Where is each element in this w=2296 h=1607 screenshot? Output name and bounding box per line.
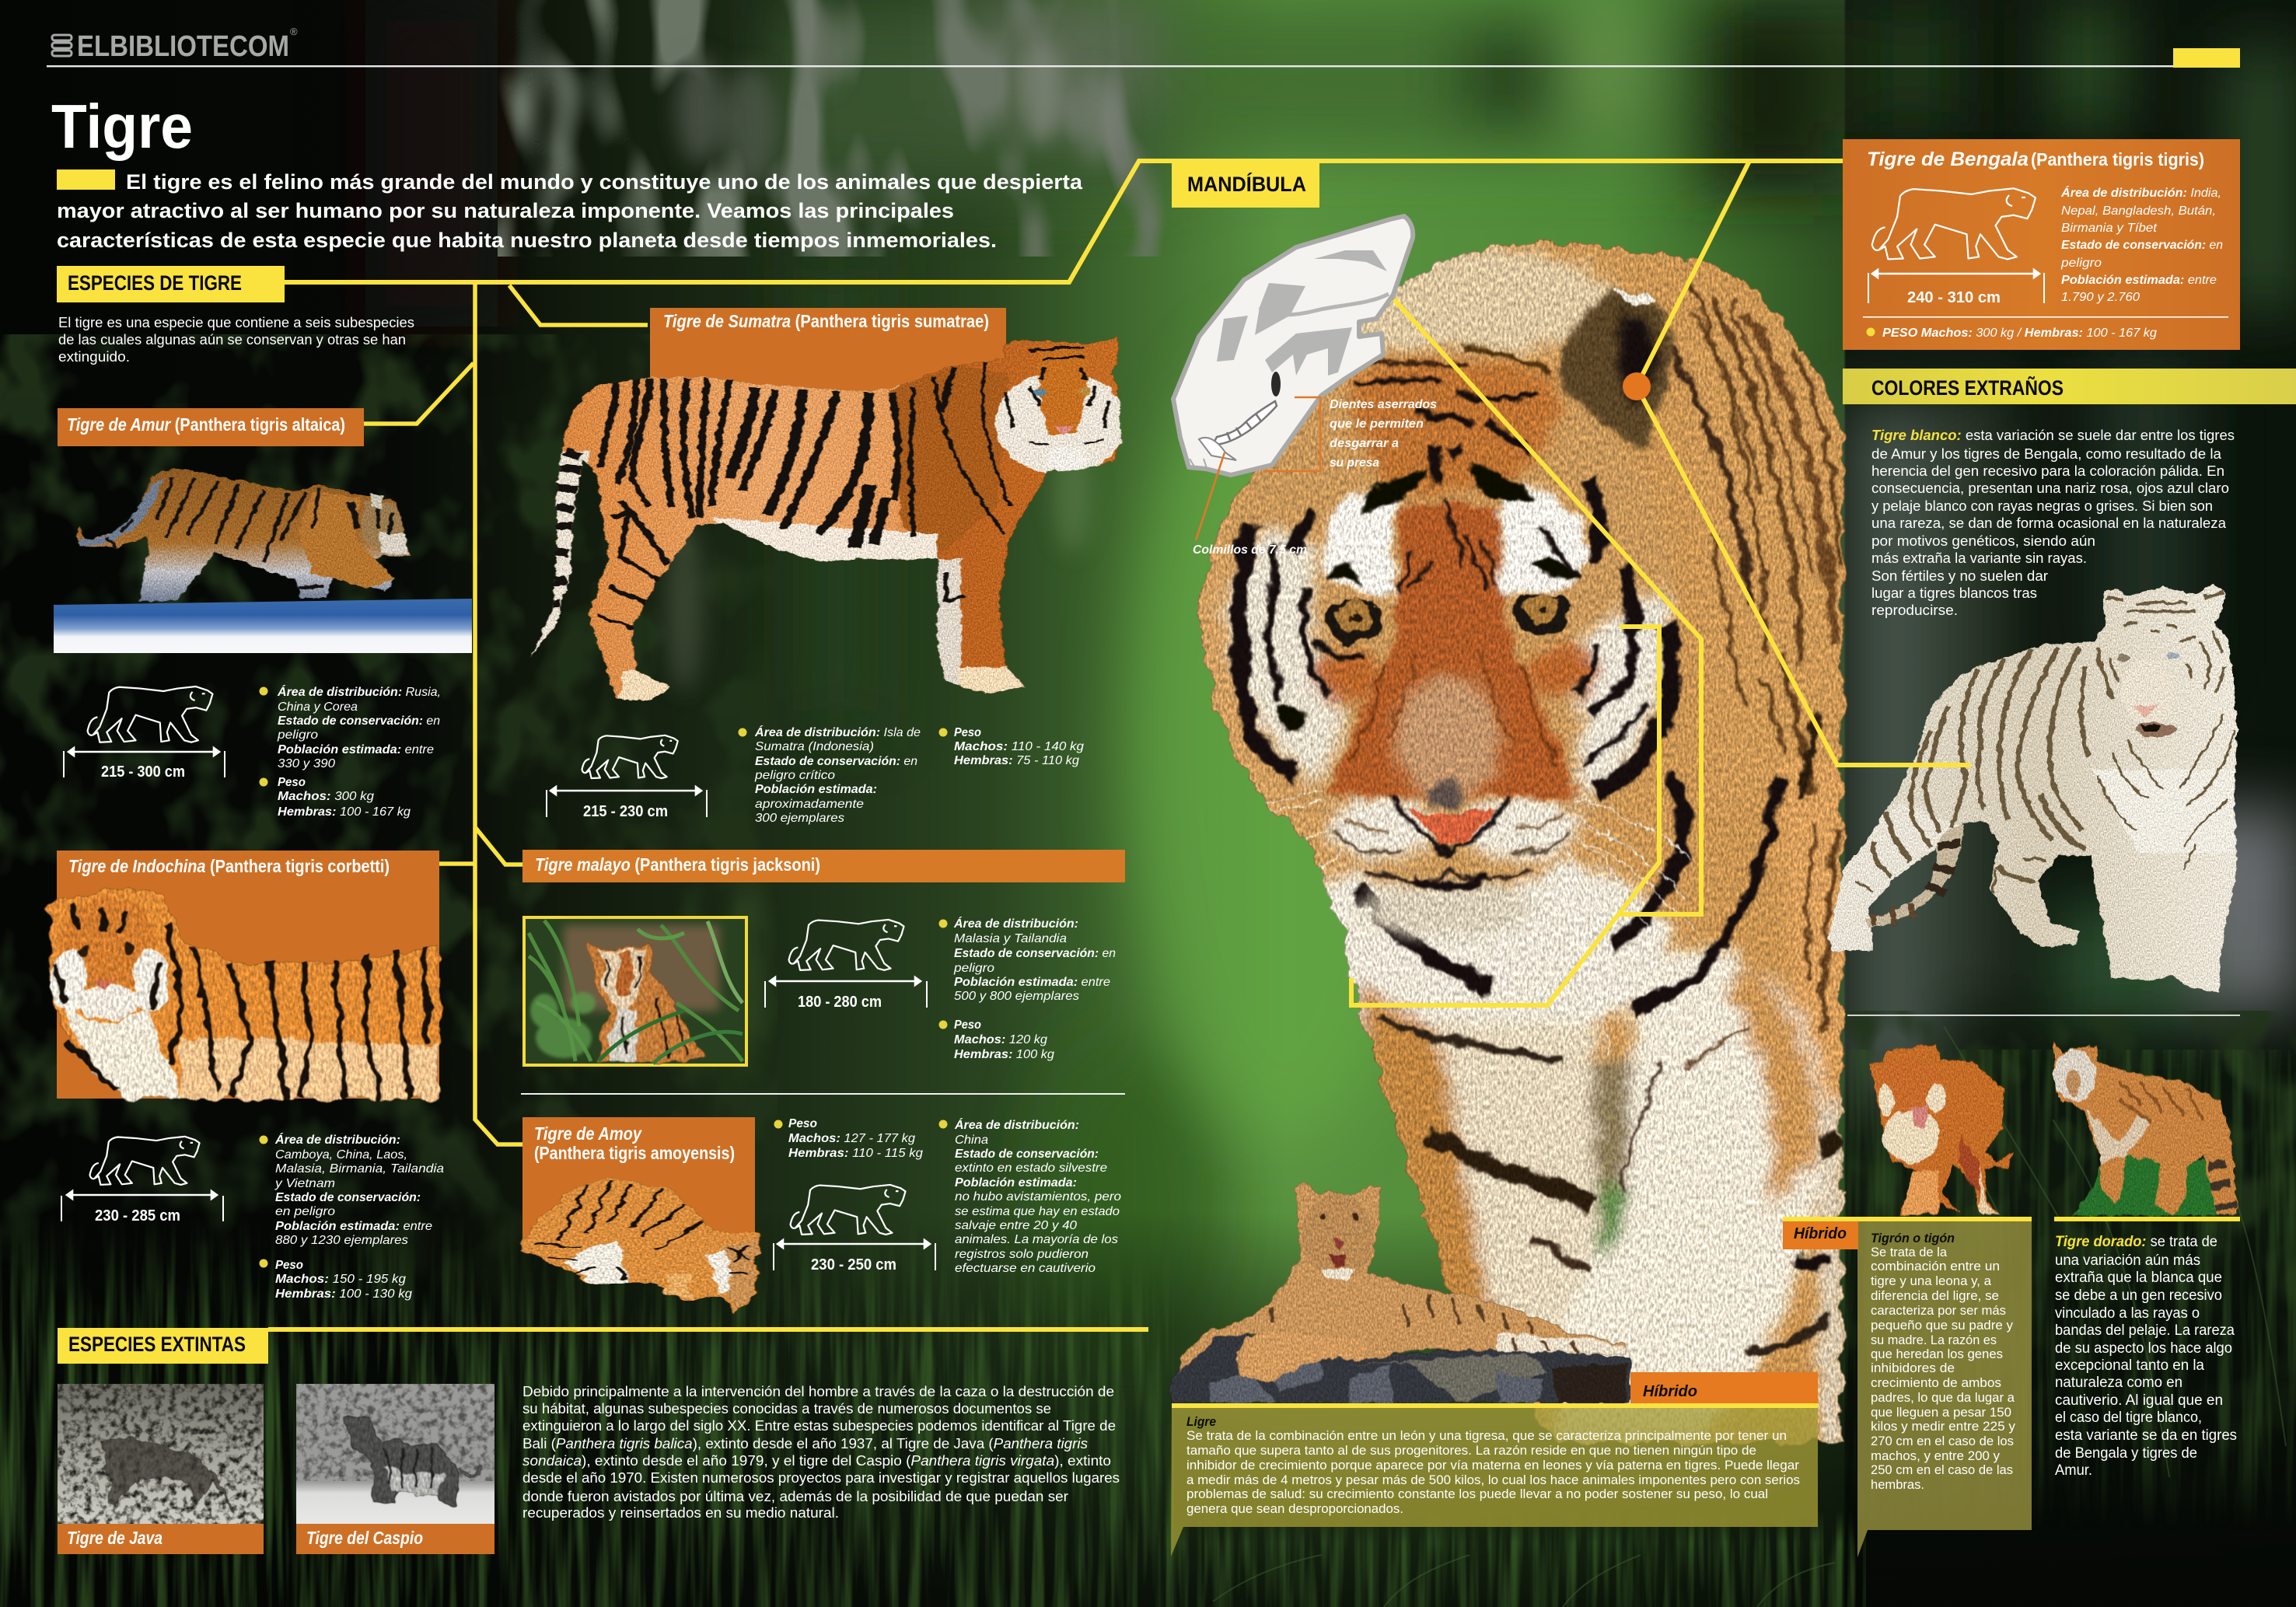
annotation: dientes aserrados: Dientes aserrados — [1330, 398, 1437, 411]
panel: tigre de amoy: (Panthera tigris amoyensis) — [534, 1143, 735, 1163]
text: tigre dorado: vinculado a las rayas o — [2055, 1305, 2200, 1322]
icon: tiger silhouette malayo, with length measure — [765, 920, 927, 1011]
text: sumatra data: Población estimada: — [755, 783, 877, 796]
panel: tigrón híbrido — [1783, 1217, 2032, 1557]
text: indochina data: Camboya, China, Laos, — [275, 1148, 407, 1162]
panel: tigrón híbrido: su madre. La razón es — [1871, 1333, 1997, 1347]
icon: tiger silhouette amoy, with length measure: 230 - 250 cm — [811, 1256, 896, 1273]
annotation lines — [1196, 397, 1320, 540]
text: tigre dorado: extraña que la blanca que — [2055, 1270, 2222, 1286]
text: extinct species: recuperados y reinsertados en su medio natural. — [522, 1505, 839, 1521]
text: bengala data: Población estimada: entre — [2061, 274, 2217, 287]
text: sumatra data: aproximadamente — [755, 798, 864, 811]
text: tigre blanco: herencia del gen recesivo para la coloración pálida. En — [1871, 463, 2224, 479]
icon: tiger silhouette sumatra, with length measure: 215 - 230 cm — [583, 803, 668, 820]
text: tigre blanco: Son fértiles y no suelen dar — [1871, 568, 2048, 584]
icon: tiger silhouette bengala — [1872, 188, 2036, 259]
text: tigre dorado: se debe a un gen recesivo — [2055, 1287, 2222, 1304]
text: indochina data: Hembras: 100 - 130 kg — [275, 1287, 412, 1301]
text: extinct species: su hábitat, algunas subespecies conocidas a través de numerosos documentos se — [522, 1401, 1051, 1417]
white tiger tail — [1865, 825, 1963, 928]
heading: mandíbula — [1172, 163, 1319, 208]
text: extinct species: desde el año 1970. Existen numerosos proyectos para investigar y registrar aquellos lugares — [522, 1470, 1120, 1486]
panel: ligre híbrido: Ligre — [1186, 1414, 1216, 1429]
text: bengala data: Birmania y Tíbet — [2061, 222, 2158, 235]
text: tigre blanco: una rareza, se dan de forma ocasional en la naturaleza — [1871, 515, 2227, 531]
text: amoy data: Machos: 127 - 177 kg — [788, 1132, 915, 1145]
annotation: dientes aserrados: desgarrar a — [1330, 437, 1399, 450]
panel: tigre de bengala — [1843, 139, 2240, 350]
text: malayo data: Estado de conservación: en — [954, 947, 1116, 960]
text: malayo data — [939, 916, 1116, 1061]
big central tiger photo — [1151, 218, 1845, 1448]
header: logo: ® — [290, 26, 298, 37]
text: sumatra data — [739, 725, 1084, 825]
text: indochina data: Machos: 150 - 195 kg — [275, 1273, 406, 1286]
text: amur data: Peso — [278, 776, 306, 789]
intro text: especies: El tigre es una especie que contiene a seis subespecies — [58, 315, 414, 330]
yellow line over white tiger — [1835, 763, 1971, 767]
text: malayo data: Machos: 120 kg — [954, 1033, 1047, 1046]
text: tigre dorado — [2054, 1217, 2240, 1479]
text: indochina data: Población estimada: entre — [275, 1220, 432, 1233]
text: amoy data: Peso — [788, 1117, 817, 1130]
text: amoy data: Estado de conservación: — [955, 1148, 1099, 1161]
text: bengala data: 1.790 y 2.760 — [2061, 291, 2140, 304]
text: amur data: China y Corea — [278, 700, 358, 714]
panel: ligre híbrido: Se trata de la combinación entre un león y una tigresa, que se caracteriza principalmente por tener un — [1186, 1428, 1787, 1443]
text: sumatra data: Estado de conservación: en — [755, 755, 917, 768]
marker dot on ear — [1623, 372, 1651, 400]
panel: tigrón híbrido: caracteriza por ser más — [1871, 1303, 2006, 1318]
annotation: colmillos: Colmillos de 7,5 cm — [1193, 543, 1307, 557]
panel: ligre híbrido: problemas de salud: su crecimiento constante los puede llevar a no poder sostener su peso, lo cual — [1186, 1486, 1768, 1501]
text: bengala data: Estado de conservación: en — [2061, 239, 2223, 252]
text: indochina data: y Vietnam — [274, 1177, 335, 1190]
panel: tigrón híbrido: tigre y una leona y, a — [1871, 1273, 1992, 1288]
photo: golden tiger — [2053, 1044, 2238, 1216]
photo: malayan tiger in jungle — [524, 917, 746, 1065]
text: bengala data: Área de distribución: India, — [2060, 185, 2221, 200]
text: amoy data: animales. La mayoría de los — [955, 1233, 1118, 1246]
panel: tigrón híbrido: Se trata de la — [1871, 1245, 1948, 1259]
text: malayo data: Malasia y Tailandia — [954, 932, 1067, 945]
text: tigre blanco — [1871, 427, 2235, 618]
photo: indochina tiger — [45, 888, 439, 1099]
heading: colores extraños — [1843, 369, 2296, 404]
annotation: dientes aserrados: su presa — [1330, 456, 1379, 470]
text: malayo data: Hembras: 100 kg — [954, 1048, 1054, 1061]
heading: colores extraños: COLORES EXTRAÑOS — [1871, 376, 2064, 400]
text: tigre dorado: bandas del pelaje. La rareza — [2055, 1322, 2235, 1339]
photo: tigron — [1869, 1044, 2015, 1216]
photo card: tigre del caspio — [296, 1384, 494, 1554]
text: extinct species: Bali (Panthera tigris balica ), extinto desde el año 1937, al Tigre de Java ( Panthera tigris — [522, 1436, 1088, 1452]
icon: tiger silhouette indochina, with length measure — [61, 1137, 223, 1224]
icon: tiger silhouette sumatra, with length measure — [547, 735, 707, 820]
text: amoy data: salvaje entre 20 y 40 — [955, 1219, 1077, 1232]
panel: tigre malayo: Tigre malayo (Panthera tigris jacksoni) — [535, 854, 820, 875]
panel: tigrón híbrido: Híbrido — [1794, 1225, 1847, 1242]
photo: amur tiger — [76, 468, 410, 602]
text: amoy data: se estima que hay en estado — [955, 1205, 1120, 1218]
panel: tigrón híbrido: 250 cm en el caso de las — [1871, 1462, 2013, 1477]
panel: tigre de indochina — [45, 851, 439, 1099]
text: bengala data: Nepal, Bangladesh, Bután, — [2061, 204, 2216, 218]
text: tigre dorado: Amur. — [2055, 1462, 2092, 1479]
text: amoy data: Población estimada: — [955, 1176, 1077, 1190]
panel: tigre de amoy: Tigre de Amoy — [534, 1123, 642, 1144]
text: tigre dorado: Tigre dorado: se trata de — [2055, 1234, 2217, 1250]
snow strip — [54, 599, 472, 653]
panel: ligre híbrido: inhibidor de crecimiento porque aparece por vía materna en leones y vía paterna en tigres. Puede llegar — [1186, 1458, 1799, 1473]
text: indochina data: 880 y 1230 ejemplares — [275, 1234, 408, 1247]
text: tigre blanco: reproducirse. — [1871, 602, 1958, 618]
text: tigre dorado: de su aspecto los hace algo — [2055, 1340, 2232, 1357]
text: sumatra data: Sumatra (Indonesia) — [755, 740, 874, 753]
panel: tigre de sumatra: Tigre de Sumatra (Panthera tigris sumatrae) — [663, 311, 989, 331]
panel: tigrón híbrido: padres, lo que da lugar a — [1871, 1390, 2015, 1405]
text: extinct species — [522, 1384, 1120, 1521]
photo card: tigre del caspio: Tigre del Caspio — [306, 1528, 423, 1548]
text: tigre dorado: el caso del tigre blanco, — [2055, 1410, 2202, 1426]
intro paragraph: El tigre es el felino más grande del mundo y constituye uno de los animales que despierta — [126, 170, 1083, 194]
panel: ligre híbrido: Híbrido — [1643, 1383, 1697, 1400]
panel: tigrón híbrido: que heredan los genes — [1871, 1347, 2003, 1361]
text: tigre dorado: de Bengala y tigres de — [2055, 1445, 2197, 1462]
photo: amoy tiger — [522, 1178, 759, 1313]
photo: white tiger — [1827, 583, 2239, 992]
text: amoy data: China — [955, 1134, 988, 1147]
header: logo: ELBIBLIOTECOM — [77, 30, 289, 63]
heading: especies extintas: ESPECIES EXTINTAS — [68, 1333, 246, 1356]
text: amur data: Machos: 300 kg — [278, 790, 374, 803]
text: sumatra data: Área de distribución: Isla de — [754, 725, 921, 739]
text: amoy data — [774, 1117, 1121, 1275]
text: sumatra data: Machos: 110 - 140 kg — [954, 740, 1084, 753]
panel: tigre de bengala: PESO Machos: 300 kg / Hembras: 100 - 167 kg — [1882, 327, 2157, 340]
intro text: especies: extinguido. — [58, 349, 130, 365]
panel: tigrón híbrido: diferencia del ligre, se — [1871, 1288, 1999, 1303]
text: indochina data: Área de distribución: — [274, 1132, 400, 1147]
photo card: tigre de java: Tigre de Java — [67, 1528, 163, 1548]
icon: tiger silhouette indochina, with length measure: 230 - 285 cm — [95, 1207, 180, 1224]
text: sumatra data: 300 ejemplares — [755, 812, 844, 825]
panel: tigre de sumatra — [513, 308, 1148, 712]
text: sumatra data: peligro crítico — [754, 769, 835, 782]
heading: especies extintas — [58, 1327, 1148, 1364]
panel: tigrón híbrido: combinación entre un — [1871, 1259, 2000, 1273]
text: bengala data: peligro — [2060, 257, 2102, 270]
panel: tigrón híbrido: inhibidores de — [1871, 1361, 1955, 1375]
annotation: dientes aserrados — [1330, 398, 1437, 470]
panel: tigrón híbrido: hembras. — [1871, 1477, 1924, 1492]
intro text: especies — [58, 315, 414, 365]
text: amoy data: Hembras: 110 - 115 kg — [788, 1147, 923, 1160]
icon: tiger silhouette amur, with length measure — [64, 686, 225, 781]
text: amur data: 330 y 390 — [278, 757, 335, 770]
panel: tigrón híbrido: pequeño que su padre y — [1871, 1318, 2013, 1333]
annotation: dientes aserrados: que le permiten — [1330, 417, 1424, 431]
text: tigre dorado: una variación aún más — [2055, 1252, 2200, 1269]
text: indochina data: Peso — [275, 1259, 303, 1272]
text: amoy data: Área de distribución: — [954, 1117, 1079, 1132]
illustration: tiger skull — [1173, 216, 1413, 540]
text: bengala data — [2060, 185, 2223, 304]
text: amur data: Población estimada: entre — [278, 743, 434, 756]
icon: tiger silhouette malayo, with length measure: 180 - 280 cm — [798, 994, 882, 1011]
text: extinct species: donde fueron avistados por última vez, además de la posibilidad de que puedan ser — [522, 1489, 1068, 1504]
text: amoy data: registros solo pudieron — [955, 1248, 1089, 1261]
text: extinct species: extinguieron a lo largo del siglo XX. Entre estas subespecies podemos identificar al Tigre de — [522, 1418, 1116, 1434]
text: extinct species: sondaica), extinto desde el año 1979, y el tigre del Caspio ( Panthera tigris virgata ), extinto — [522, 1453, 1111, 1469]
heading: especies de tigre: ESPECIES DE TIGRE — [68, 271, 242, 295]
intro text: especies: de las cuales algunas aún se conservan y otras se han — [58, 332, 406, 348]
panel: tigre de bengala: Tigre de Bengala — [1867, 148, 2029, 170]
panel: tigrón híbrido: Tigrón o tigón — [1871, 1231, 1955, 1245]
panel: tigrón híbrido: crecimiento de ambos — [1871, 1375, 2001, 1390]
panel: tigrón híbrido: que lleguen a pesar 150 — [1871, 1405, 2011, 1420]
panel: ligre híbrido: tamaño que supera tanto al de sus progenitores. La razón reside en que no tienen ningún tipo de — [1186, 1443, 1756, 1458]
heading: especies de tigre — [57, 266, 285, 302]
panel: ligre híbrido: genera que sean desproporcionados. — [1186, 1501, 1403, 1516]
text: malayo data: 500 y 800 ejemplares — [954, 990, 1079, 1003]
icon: tiger silhouette amur, with length measure: 215 - 300 cm — [101, 763, 185, 781]
header yellow tab — [2173, 48, 2240, 68]
photo: ligre on rocks — [1172, 1183, 1630, 1403]
text: sumatra data: Peso — [954, 726, 981, 739]
intro paragraph: mayor atractivo al ser humano por su naturaleza imponente. Veamos las principales — [57, 199, 954, 222]
panel: tigre de bengala: 240 - 310 cm — [1907, 289, 2001, 306]
photo: sumatra tiger — [530, 337, 1124, 701]
text: malayo data: Área de distribución: — [953, 916, 1078, 931]
text: malayo data: peligro — [953, 962, 994, 975]
text: amoy data: no hubo avistamientos, pero — [955, 1190, 1121, 1204]
text: indochina data: Estado de conservación: — [275, 1191, 421, 1204]
connector lines: yellow callouts on the big tiger — [1351, 161, 1971, 1005]
text: indochina data: Malasia, Birmania, Tailandia — [275, 1162, 444, 1176]
text: amur data: Estado de conservación: en — [278, 714, 440, 728]
text: tigre blanco: Tigre blanco: esta variación se suele dar entre los tigres — [1871, 427, 2235, 443]
text: extinct species: Debido principalmente a la intervención del hombre a través de la caza o la destrucción de — [522, 1384, 1114, 1399]
text: indochina data — [260, 1132, 444, 1301]
text: tigre blanco: de Amur y los tigres de Bengala, como resultado de la — [1871, 445, 2222, 462]
intro paragraph: características de esta especie que habita nuestro planeta desde tiempos inmemoriales. — [57, 229, 997, 252]
text: sumatra data: Hembras: 75 - 110 kg — [954, 754, 1079, 767]
panel: tigre malayo — [522, 850, 1125, 1065]
title: Tigre — [51, 92, 193, 161]
text: amur data: Área de distribución: Rusia, — [277, 684, 441, 699]
panel: tigre de amur: Tigre de Amur (Panthera tigris altaica) — [67, 414, 345, 435]
panel: ligre híbrido: a medir más de 4 metros y pesar más de 500 kilos, lo cual los hace animales imponentes pero con serios — [1186, 1473, 1800, 1487]
panel: tigre de amoy — [522, 1117, 759, 1313]
text: amoy data: extinto en estado silvestre — [955, 1162, 1107, 1175]
panel: tigre de indochina: Tigre de Indochina (Panthera tigris corbetti) — [68, 856, 390, 876]
text: amur data — [260, 684, 441, 819]
text: tigre dorado: esta variante se da en tigres — [2055, 1427, 2237, 1444]
text: tigre dorado: naturaleza como en — [2055, 1375, 2182, 1391]
panel: tigrón híbrido: 270 cm en el caso de los — [1871, 1434, 2014, 1448]
text: amur data: peligro — [277, 728, 318, 742]
teeth row — [1213, 401, 1277, 445]
heading: mandíbula: MANDÍBULA — [1187, 172, 1306, 196]
text: amur data: Hembras: 100 - 167 kg — [278, 805, 411, 819]
icon: tiger silhouette amoy, with length measure — [774, 1185, 935, 1273]
text: malayo data: Población estimada: entre — [954, 976, 1110, 989]
intro paragraph — [57, 169, 1083, 252]
panel: tigre de bengala: (Panthera tigris tigris) — [2031, 149, 2204, 169]
photo card: tigre de java — [58, 1384, 264, 1554]
text: tigre blanco: por motivos genéticos, siendo aún — [1871, 533, 2095, 549]
text: tigre dorado: cautiverio. Al igual que en — [2055, 1392, 2223, 1409]
panel: tigrón híbrido: machos, y entre 200 y — [1871, 1448, 2000, 1463]
panel: tigre de amur — [54, 408, 472, 653]
text: tigre blanco: más extraña la variante sin rayas. — [1871, 550, 2087, 566]
text: amoy data: efectuarse en cautiverio — [955, 1262, 1096, 1275]
text: indochina data: en peligro — [275, 1205, 335, 1218]
tree connector: species branch lines — [285, 161, 1843, 1144]
panel: tigrón híbrido: kilos y medir entre 225 y — [1871, 1419, 2015, 1434]
text: tigre blanco: lugar a tigres blancos tras — [1871, 585, 2037, 601]
text: tigre blanco: consecuencia, presentan una nariz rosa, ojos azul claro — [1871, 480, 2229, 496]
text: tigre blanco: y pelaje blanco con rayas negras o grises. Si bien son — [1871, 498, 2213, 514]
text: malayo data: Peso — [954, 1018, 981, 1032]
text: tigre dorado: excepcional tanto en la — [2055, 1357, 2204, 1374]
panel: ligre híbrido — [1171, 1372, 1818, 1556]
